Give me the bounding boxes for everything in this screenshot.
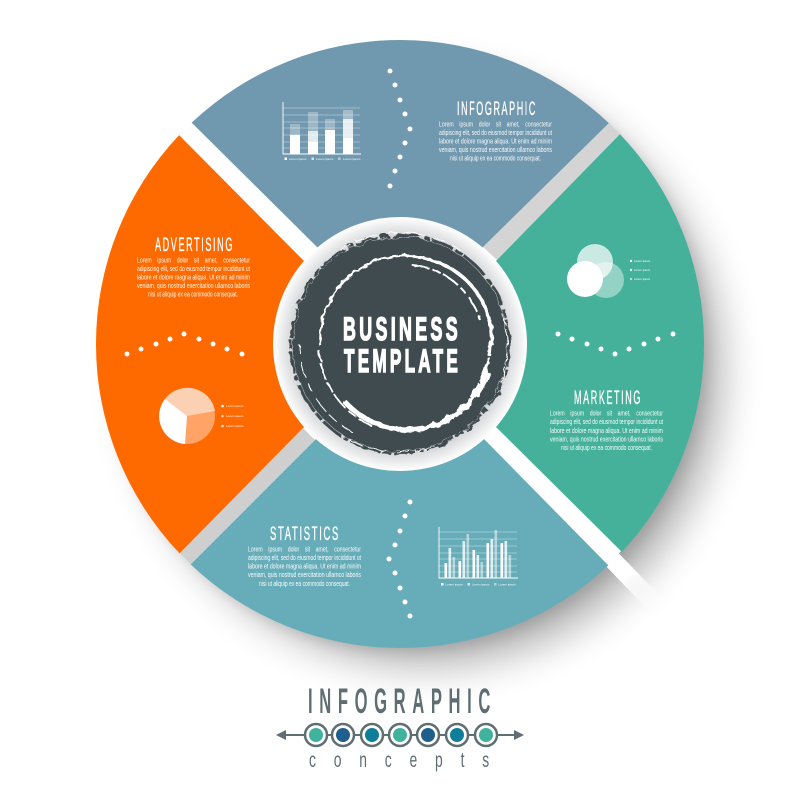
brush ring xyxy=(300,233,508,452)
footer timeline xyxy=(276,724,524,746)
center badge xyxy=(273,217,527,471)
chart: venn xyxy=(567,244,651,298)
panel: marketing (right) xyxy=(400,134,704,552)
chart: grouped bars: Lorem ipsum xyxy=(472,582,490,586)
badge title: TEMPLATE xyxy=(344,343,461,379)
text block: adipiscing elit, sed do eiusmod tempor incididunt ut xyxy=(248,553,361,562)
chart: stacked bars xyxy=(283,102,361,161)
text block: veniam, quis nostrud exercitation ullamco laboris xyxy=(550,434,663,444)
footer subtitle: concepts xyxy=(309,749,507,772)
panel: infographic (top) xyxy=(192,40,609,330)
text block: nisi ut aliquip ex ea commodo consequat. xyxy=(561,443,652,452)
chart: grouped bars: Lorem ipsum xyxy=(446,582,463,586)
text block: labore et dolore magna aliqua. Ut enim ad minim xyxy=(439,136,552,146)
text: INFOGRAPHIC xyxy=(308,682,497,721)
wheel drop shadow xyxy=(108,52,722,666)
chart: venn: Lorem ipsum xyxy=(634,259,651,263)
text block: adipiscing elit, sed do eiusmod tempor incididunt ut xyxy=(137,264,250,273)
dotted divider xyxy=(386,500,412,618)
text block: adipiscing elit, sed do eiusmod tempor incididunt ut xyxy=(550,417,663,426)
text block: nisi ut aliquip ex ea commodo consequat. xyxy=(148,290,238,298)
text block: nisi ut aliquip ex ea commodo consequat. xyxy=(259,579,350,588)
chart: venn: Lorem ipsum xyxy=(634,268,651,272)
chart: stacked bars: Lorem ipsum xyxy=(316,157,334,161)
chart: venn: Lorem ipsum xyxy=(634,277,651,281)
chart: pie xyxy=(159,388,244,444)
text block: labore et dolore magna aliqua. Ut enim ad minim xyxy=(137,272,250,282)
gap band: lower right white xyxy=(485,428,668,612)
text block: labore et dolore magna aliqua. Ut enim ad minim xyxy=(248,562,361,570)
brush disc xyxy=(291,235,509,453)
text block xyxy=(248,544,361,588)
text block: Lorem ipsum dolor sit amet, consectetur xyxy=(248,544,361,554)
dotted divider xyxy=(388,68,412,188)
dotted divider xyxy=(556,332,676,356)
chart: grouped bars xyxy=(439,527,518,586)
text block xyxy=(439,120,552,162)
text block: Lorem ipsum dolor sit amet, consectetur xyxy=(550,408,663,418)
badge title: BUSINESS xyxy=(343,311,461,347)
chart: pie: Lorem ipsum xyxy=(226,404,244,408)
text block: veniam, quis nostrud exercitation ullamco laboris xyxy=(137,281,250,290)
text block: veniam, quis nostrud exercitation ullamco laboris xyxy=(248,570,361,579)
text block xyxy=(550,408,663,452)
chart: stacked bars: Lorem ipsum xyxy=(289,157,307,161)
chart: pie: Lorem ipsum xyxy=(226,414,244,418)
chart: stacked bars: Lorem ipsum xyxy=(343,157,361,161)
panel: statistics (bottom) xyxy=(191,344,608,648)
panel: infographic (top): INFOGRAPHIC xyxy=(457,98,537,120)
hub ring xyxy=(273,217,527,471)
text block: Lorem ipsum dolor sit amet, consectetur xyxy=(439,120,552,128)
text block: adipiscing elit, sed do eiusmod tempor incididunt ut xyxy=(439,128,552,137)
text block: veniam, quis nostrud exercitation ullamco laboris xyxy=(439,145,552,154)
chart: grouped bars: Lorem ipsum xyxy=(498,582,516,586)
panel: advertising (left) xyxy=(96,135,400,553)
gap band: upper right grey xyxy=(483,123,620,260)
gap band: lower left grey xyxy=(180,428,315,564)
white base disc xyxy=(97,41,703,647)
text block: nisi ut aliquip ex ea commodo consequat. xyxy=(450,154,541,162)
panel: statistics (bottom): STATISTICS xyxy=(270,523,340,545)
dotted divider xyxy=(124,332,244,356)
text block: Lorem ipsum dolor sit amet, consectetur xyxy=(137,256,250,264)
badge title xyxy=(343,311,461,379)
chart: pie: Lorem ipsum xyxy=(226,424,244,428)
text block: labore et dolore magna aliqua. Ut enim ad minim xyxy=(550,426,663,435)
text block xyxy=(137,256,250,298)
panel: advertising (left): ADVERTISING xyxy=(155,234,234,256)
panel: marketing (right): MARKETING xyxy=(574,387,642,409)
